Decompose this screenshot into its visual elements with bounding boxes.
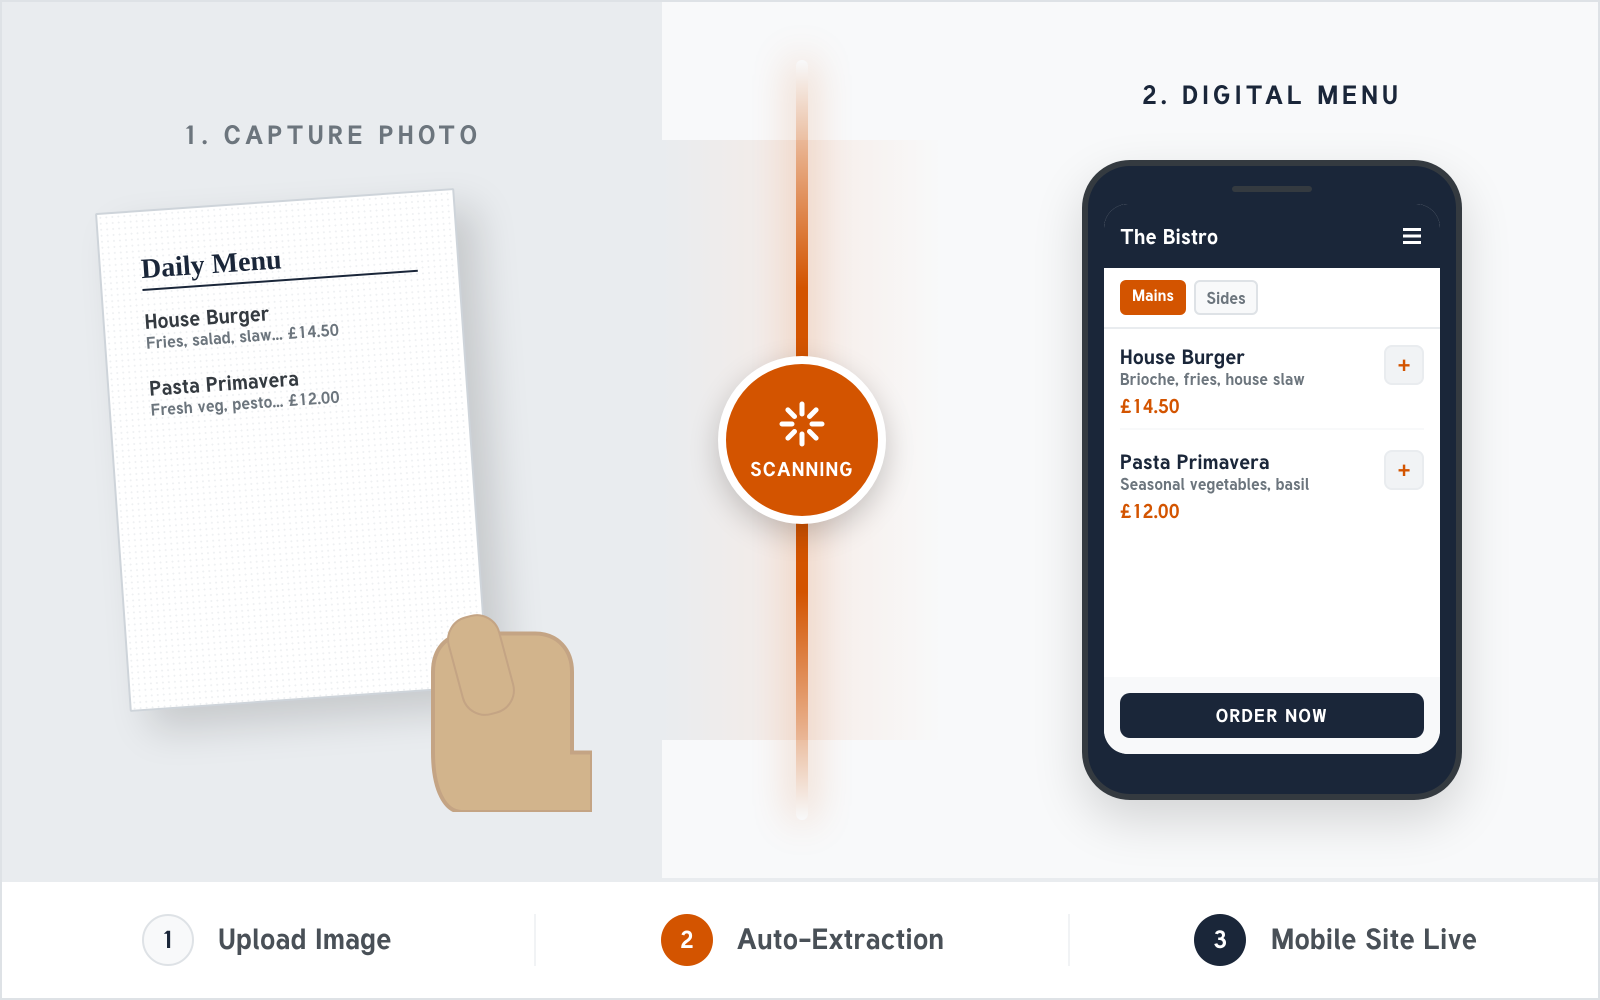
panel: capture photo: [2, 2, 662, 882]
paper item: pasta primavera: [148, 361, 341, 421]
footer top rule: [662, 878, 1598, 882]
order bar: [1104, 677, 1440, 754]
scan beam: [796, 60, 808, 820]
divider: [1068, 914, 1070, 966]
menu item: house burger: [1120, 329, 1424, 430]
scanning badge: [718, 356, 886, 524]
divider: [534, 914, 536, 966]
heading: capture photo: 1. CAPTURE PHOTO: [183, 114, 481, 153]
step 3 badge: 3: [1213, 922, 1227, 957]
icon: menu: [1403, 228, 1421, 244]
tab: mains: Mains: [1132, 284, 1174, 307]
step 2: [661, 914, 944, 966]
scan band: [662, 140, 942, 740]
step 3 badge: [1194, 914, 1246, 966]
tab: sides: Sides: [1206, 285, 1246, 310]
phone speaker: [1232, 186, 1312, 192]
step 1 label: Upload Image: [218, 916, 391, 959]
category tabs: [1104, 268, 1440, 329]
tab: mains: [1120, 280, 1186, 315]
step 1 badge: [142, 914, 194, 966]
app header: [1104, 204, 1440, 268]
panel: digital menu background: [662, 2, 1598, 878]
phone screen: [1104, 204, 1440, 754]
order button: [1120, 693, 1424, 738]
order button: ORDER NOW: [1216, 702, 1328, 729]
paper item: pasta primavera: Fresh veg, pesto... £12.00: [150, 383, 341, 421]
menu item: pasta primavera: [1120, 446, 1424, 525]
paper item: house burger: House Burger: [144, 297, 270, 336]
menu item: house burger: House Burger: [1120, 341, 1245, 372]
step 2 label: Auto-Extraction: [737, 916, 944, 959]
menu item: pasta primavera: Seasonal vegetables, basil: [1120, 471, 1309, 496]
paper rule: [142, 269, 418, 290]
menu item: pasta primavera: +: [1398, 458, 1410, 483]
menu item: pasta primavera: £12.00: [1120, 497, 1180, 525]
scanning label: SCANNING: [750, 454, 854, 483]
icon: hand holding paper: [431, 614, 592, 812]
hand thumb: [443, 610, 519, 720]
paper item: house burger: [144, 297, 340, 354]
heading: digital menu: 2. DIGITAL MENU: [1142, 74, 1402, 113]
app title: The Bistro: [1120, 221, 1218, 252]
hand palm: [433, 634, 592, 812]
step 3: [1194, 914, 1477, 966]
step 3 label: Mobile Site Live: [1271, 916, 1477, 959]
phone: [1082, 160, 1462, 800]
menu item: pasta primavera: Pasta Primavera: [1120, 446, 1270, 477]
paper item: pasta primavera: Pasta Primavera: [148, 361, 300, 403]
menu paper photo: [95, 188, 489, 711]
paper item: house burger: Fries, salad, slaw... £14.50: [145, 316, 340, 354]
step 2 badge: [661, 914, 713, 966]
menu item: house burger: £14.50: [1120, 392, 1180, 420]
icon: loader: [780, 402, 824, 446]
step 2 badge: 2: [680, 922, 694, 957]
step 1 badge: 1: [161, 922, 175, 957]
menu item: house burger: Brioche, fries, house slaw: [1120, 366, 1305, 391]
paper title: Daily Menu: [140, 243, 283, 284]
tab: sides: [1194, 280, 1258, 315]
menu item: house burger: +: [1398, 353, 1410, 378]
step 1: [142, 914, 391, 966]
